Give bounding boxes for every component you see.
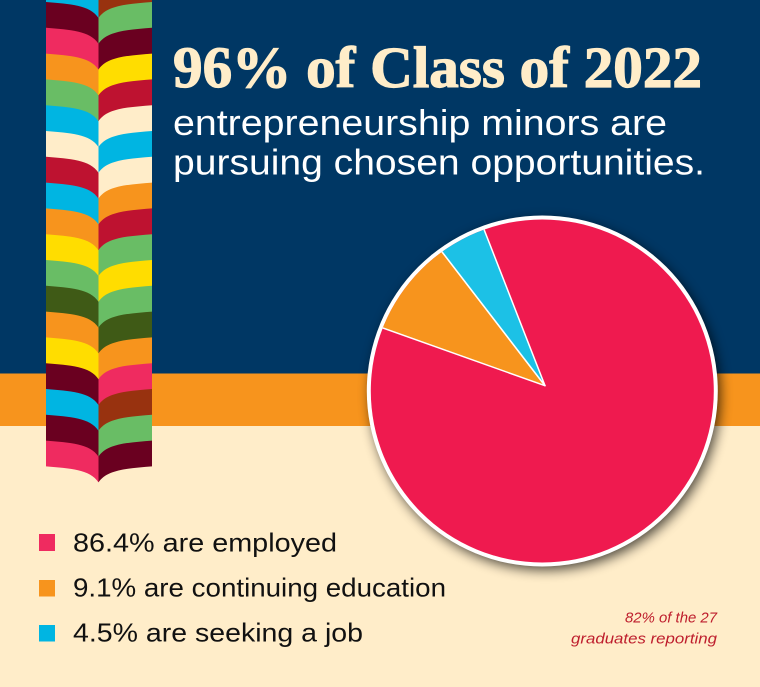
- slice: employed 86.4%: [370, 220, 714, 562]
- subtitle: pursuing chosen opportunities.: [173, 141, 705, 182]
- legend item: employed: 86.4% are employed: [73, 528, 337, 558]
- legend: [39, 528, 446, 648]
- pie chart: [350, 200, 730, 575]
- subtitle: entrepreneurship minors are: [173, 102, 667, 143]
- slice: seeking a job 4.5%: [442, 230, 546, 386]
- background: navy band: [0, 0, 760, 374]
- footnote: 82% of the 27: [625, 609, 718, 626]
- slice: continuing education 9.1%: [382, 252, 546, 386]
- background: cream band: [0, 426, 760, 687]
- title: 96% of Class of 2022: [173, 35, 702, 100]
- background: orange band: [0, 374, 760, 426]
- footnote: [571, 609, 718, 647]
- subtitle: [173, 102, 705, 182]
- legend item: continuing education: 9.1% are continuing education: [73, 573, 446, 603]
- legend item: seeking a job: 4.5% are seeking a job: [73, 618, 363, 648]
- ribbon: multicolour woven banner: [46, 0, 152, 482]
- footnote: graduates reporting: [571, 630, 718, 647]
